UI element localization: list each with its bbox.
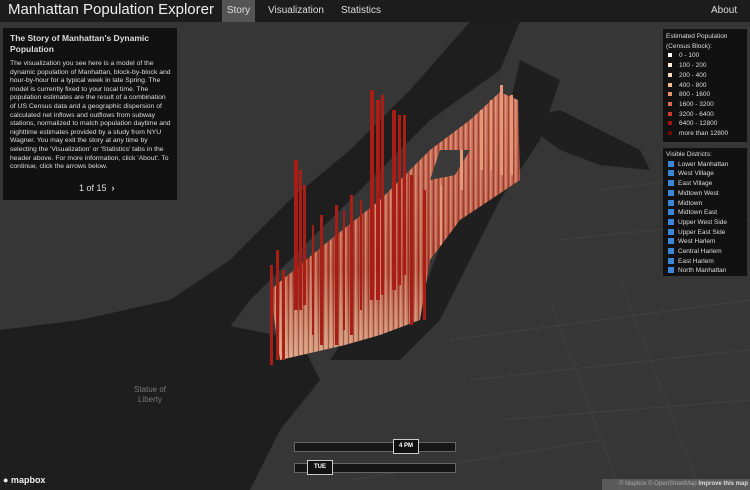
panel: legend: Estimated Population bbox=[666, 33, 727, 40]
panel: districts: West Harlem bbox=[678, 238, 715, 245]
panel: districts: Midtown West bbox=[678, 190, 719, 197]
map background: Liberty bbox=[138, 395, 162, 404]
manhattan population mass bbox=[270, 85, 520, 365]
panel: legend: 800 - 1600 bbox=[679, 91, 710, 98]
slider: time: 4 PM bbox=[399, 443, 413, 449]
water: East river bbox=[330, 60, 560, 360]
attribution: © Mapbox © OpenStreetMap Improve this map bbox=[619, 481, 748, 487]
panel: districts bbox=[663, 148, 747, 276]
panel: legend: more than 12800 bbox=[679, 130, 728, 137]
pager: 1 of 15 › bbox=[79, 183, 115, 193]
panel: districts: North Manhattan bbox=[678, 267, 726, 274]
panel: legend: 1600 - 3200 bbox=[679, 101, 714, 108]
panel: legend: 100 - 200 bbox=[679, 62, 706, 69]
tab: statistics: Statistics bbox=[341, 5, 381, 16]
panel: legend: 3200 - 6400 bbox=[679, 111, 714, 118]
panel: legend: 0 - 100 bbox=[679, 52, 699, 59]
panel: legend: (Census Block): bbox=[666, 43, 712, 50]
panel: districts: East Village bbox=[678, 180, 712, 187]
panel: districts: Lower Manhattan bbox=[678, 161, 728, 168]
water: bay bbox=[0, 320, 320, 490]
panel: districts: Midtown bbox=[678, 200, 702, 207]
panel: legend bbox=[663, 29, 747, 142]
panel: districts: Visible Districts: bbox=[666, 151, 712, 158]
attribution bbox=[602, 479, 750, 490]
tab: story bbox=[222, 0, 255, 22]
panel: story bbox=[3, 28, 177, 200]
title: Manhattan Population Explorer bbox=[8, 1, 214, 18]
water: Hudson river bbox=[0, 22, 520, 440]
slider: day bbox=[294, 463, 456, 473]
map background: Statue of bbox=[134, 385, 167, 394]
panel: districts: Midtown East bbox=[678, 209, 717, 216]
panel: districts: East Harlem bbox=[678, 258, 714, 265]
story text: The visualization you see here is a model of the dynamic population of Manhattan, block-by-block and hour-by-hour for a typical week in late Spring. The model is currently fixed to your local time. The population estimates are the result of a combination of US Census data and a geographic dispersion of calculated net inflows and outflows from subway stations, normalized to match population daytime and nighttime estimates provided by a study from NYU Wagner. You may exit the story at any time by selecting the 'Visualization' or 'Statistics' tabs in the header above. For more information, click 'About'. To continue, click the arrows below. bbox=[10, 60, 171, 170]
mapbox logo: ● mapbox bbox=[3, 475, 45, 485]
tab: visualization: Visualization bbox=[268, 5, 324, 16]
slider: day: TUE bbox=[314, 464, 326, 470]
header bbox=[0, 0, 750, 22]
story heading: The Story of Manhattan's Dynamic Population bbox=[10, 33, 149, 54]
tab: about: About bbox=[711, 5, 737, 16]
panel: districts: Upper West Side bbox=[678, 219, 727, 226]
panel: legend: 6400 - 12800 bbox=[679, 120, 717, 127]
slider: time bbox=[294, 442, 456, 452]
panel: districts: Central Harlem bbox=[678, 248, 722, 255]
panel: districts: West Village bbox=[678, 170, 714, 177]
panel: legend: 200 - 400 bbox=[679, 72, 706, 79]
panel: legend: 400 - 800 bbox=[679, 82, 706, 89]
panel: districts: Upper East Side bbox=[678, 229, 725, 236]
tab: story: Story bbox=[227, 5, 250, 16]
